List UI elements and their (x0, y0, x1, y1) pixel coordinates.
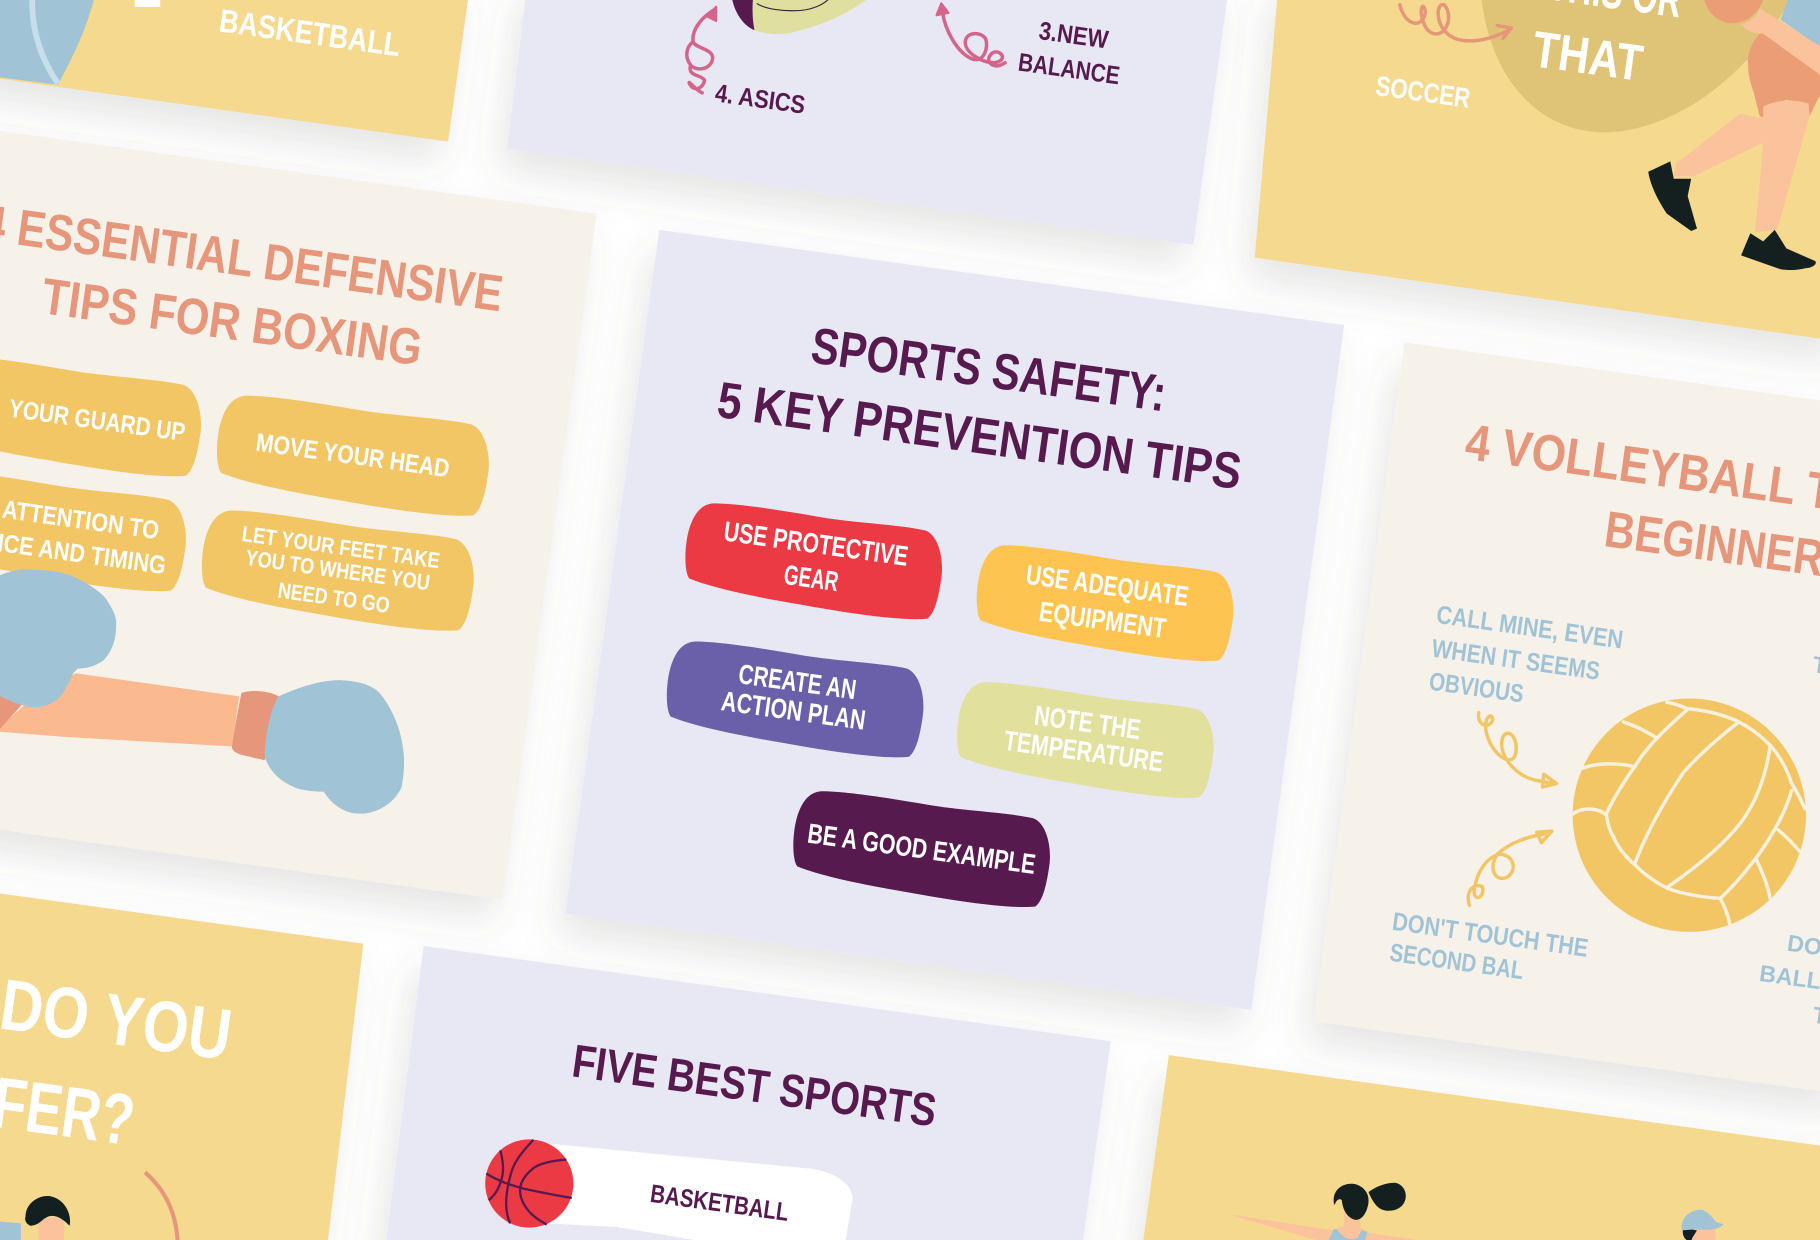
bubble: temperature: NOTE THE (1033, 700, 1143, 745)
arrow: to soccer (1400, 5, 1511, 41)
heading: five best sports: FIVE BEST SPORTS (569, 1035, 940, 1136)
bubble: protective gear (680, 497, 948, 625)
label: soccer: SOCCER (1374, 70, 1472, 114)
bubble: let your feet: LET YOUR FEET TAKE (240, 521, 442, 573)
icon: blue ball (0, 0, 95, 85)
panel: boxing tips card left (0, 128, 597, 900)
panel: fitness card bottom right (1140, 1055, 1820, 1240)
panel: sports safety card centre (565, 230, 1344, 1010)
panel: shoe brands card top centre (507, 0, 1230, 245)
illustration: player head and racket arc (0, 1172, 178, 1240)
icon: shoe (731, 0, 873, 34)
tip: second ball (1388, 908, 1590, 985)
tip: call mine: OBVIOUS (1427, 668, 1525, 708)
tip: clipped right side (1758, 651, 1820, 1029)
icon: volleyball (1573, 699, 1806, 932)
bubble: good example: BE A GOOD EXAMPLE (806, 818, 1038, 880)
tip: second ball: DON'T TOUCH THE (1391, 908, 1590, 963)
bubble: adequate equipment: USE ADEQUATE (1024, 559, 1191, 612)
bubble: guard up: YOUR GUARD UP (7, 395, 187, 447)
panel: basketball card top left (0, 0, 471, 142)
arrow: upper to ball (1478, 713, 1557, 787)
panel: five best sports card bottom centre (383, 946, 1111, 1240)
bubble: adequate equipment: EQUIPMENT (1037, 596, 1168, 644)
heading: this or that (1529, 0, 1686, 92)
bubble: move your head (211, 389, 495, 521)
illustration: woman exercising (1228, 1183, 1447, 1240)
bubble: protective gear: GEAR (782, 559, 840, 597)
arrow: to Asics (687, 7, 716, 93)
bar: basketball row (546, 1143, 853, 1240)
label: New Balance: BALANCE (1016, 49, 1121, 90)
illustration: man with cap (1682, 1209, 1724, 1240)
bubble: attention to distance and timing (0, 465, 192, 597)
label: New Balance: 3.NEW (1037, 17, 1111, 55)
label: Asics: 4. ASICS (713, 80, 807, 120)
tip: call mine (1427, 601, 1625, 708)
bubble: move your head: MOVE YOUR HEAD (254, 429, 451, 483)
bubble: action plan: CREATE AN (737, 658, 858, 705)
label: basketball: BASKETBALL (649, 1180, 790, 1227)
label: New Balance (1016, 17, 1121, 90)
heading: sports safety: SPORTS SAFETY: (808, 317, 1170, 422)
bubble: good example (788, 785, 1056, 912)
label: basketball: BASKETBALL (217, 3, 403, 63)
bubble: action plan: ACTION PLAN (719, 685, 867, 736)
bubble: let your feet (196, 504, 480, 636)
backdrop blob (1481, 0, 1793, 132)
bubble: attention to distance and timing: ICE AND TIMING (0, 529, 168, 580)
heading: sports safety: 5 KEY PREVENTION TIPS (714, 371, 1245, 500)
tip: call mine: WHEN IT SEEMS (1430, 635, 1602, 686)
bubble: protective gear: USE PROTECTIVE (722, 516, 910, 572)
heading: do you prefer: DO YOU (0, 965, 236, 1076)
illustration: boxer arm and gloves (0, 570, 404, 814)
icon: basketball (485, 1139, 573, 1228)
bubble: temperature: TEMPERATURE (1002, 725, 1165, 777)
arrow: lower to ball (1468, 831, 1552, 905)
bubble: temperature (952, 676, 1219, 803)
bubble: let your feet: YOU TO WHERE YOU (244, 545, 431, 595)
panel: volleyball tips card right (1314, 342, 1820, 1095)
tip: second ball: SECOND BAL (1388, 939, 1525, 985)
arrow: to New Balance (937, 3, 1005, 66)
heading: this or that: THAT (1529, 20, 1646, 92)
panel: this or that card top right (1255, 0, 1820, 342)
panel: which do you prefer card bottom left (0, 890, 363, 1240)
illustration: player (1648, 0, 1820, 270)
tip: call mine: CALL MINE, EVEN (1435, 601, 1625, 655)
bubble: adequate equipment (971, 539, 1239, 666)
bubble: action plan (661, 636, 929, 763)
bubble: guard up (0, 350, 207, 482)
heading: boxing tips (0, 194, 506, 376)
heading: volleyball tips (1462, 413, 1820, 587)
bubble: let your feet: NEED TO GO (276, 578, 391, 618)
heading: sports safety (714, 317, 1245, 500)
bubble: attention to distance and timing: ATTENTION TO (0, 496, 161, 545)
heading: do you prefer (0, 965, 236, 1161)
heading: boxing tips: TIPS FOR BOXING (38, 267, 426, 376)
